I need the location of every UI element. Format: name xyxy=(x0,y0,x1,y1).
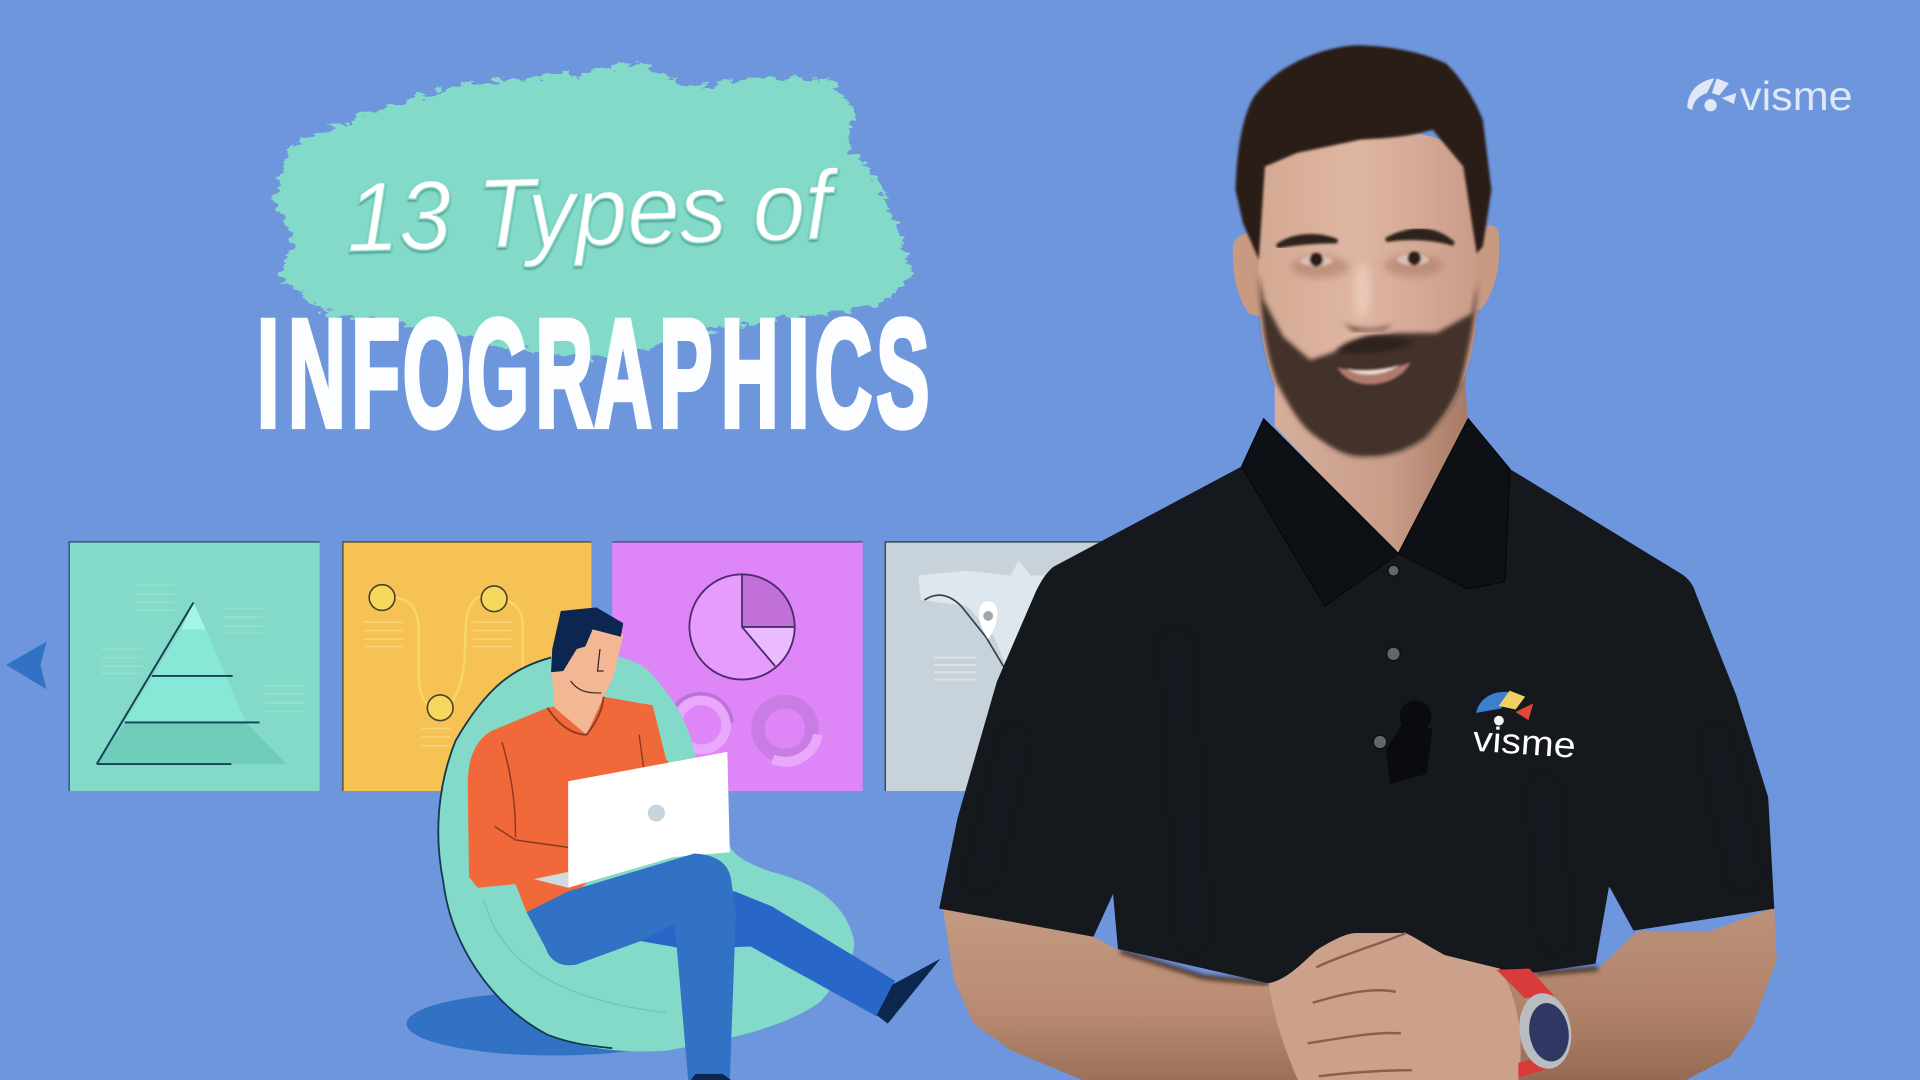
panel: timeline infographic card xyxy=(343,542,591,791)
eyebrows xyxy=(1277,230,1453,246)
beard xyxy=(1259,273,1478,457)
front leg xyxy=(527,853,736,1080)
shirt xyxy=(939,419,1774,986)
shirt buttons xyxy=(1373,565,1400,749)
back leg xyxy=(637,891,895,1016)
shirt logo: visme xyxy=(1472,719,1577,766)
wrist watch xyxy=(1496,969,1576,1078)
shoe: left xyxy=(691,1074,731,1080)
brush stroke behind title xyxy=(272,61,913,358)
floor shadow xyxy=(407,992,700,1056)
neck and face xyxy=(551,627,623,735)
neck xyxy=(1275,367,1468,558)
hair xyxy=(1236,45,1491,260)
face xyxy=(1259,130,1478,458)
sweater xyxy=(468,697,686,912)
shirt folds xyxy=(980,637,1745,943)
mouth xyxy=(1337,362,1411,384)
eyes xyxy=(1300,252,1429,266)
right arm xyxy=(1482,907,1777,1080)
hair xyxy=(551,607,623,672)
shoe: right xyxy=(877,959,940,1024)
laptop xyxy=(568,752,730,888)
title line: 13 Types of: 13 Types of xyxy=(345,149,841,272)
panel: pyramid infographic card xyxy=(69,542,320,791)
presenter xyxy=(939,45,1777,1080)
logo wordmark: visme xyxy=(1740,73,1853,119)
ears xyxy=(1233,225,1499,318)
visme logo xyxy=(1687,73,1853,119)
collar xyxy=(1242,419,1510,606)
logo mark xyxy=(1687,78,1736,110)
panel: map infographic card xyxy=(885,542,1112,791)
bean bag chair xyxy=(438,653,854,1051)
lapel microphone xyxy=(1386,700,1433,784)
arm hair fringe xyxy=(1120,951,1598,983)
left arm xyxy=(943,909,1335,1080)
hands xyxy=(1269,933,1521,1080)
finger details xyxy=(1308,933,1412,1076)
logo dot xyxy=(1704,99,1717,111)
arrow: previous xyxy=(6,642,47,689)
panel: pie chart infographic card xyxy=(612,542,863,791)
eye shadows xyxy=(1291,255,1442,278)
nose xyxy=(1341,264,1397,332)
shirt logo xyxy=(1472,688,1579,766)
title line: INFOGRAPHICS: INFOGRAPHICS xyxy=(257,288,929,459)
illustration: man on bean bag with laptop xyxy=(407,607,940,1080)
